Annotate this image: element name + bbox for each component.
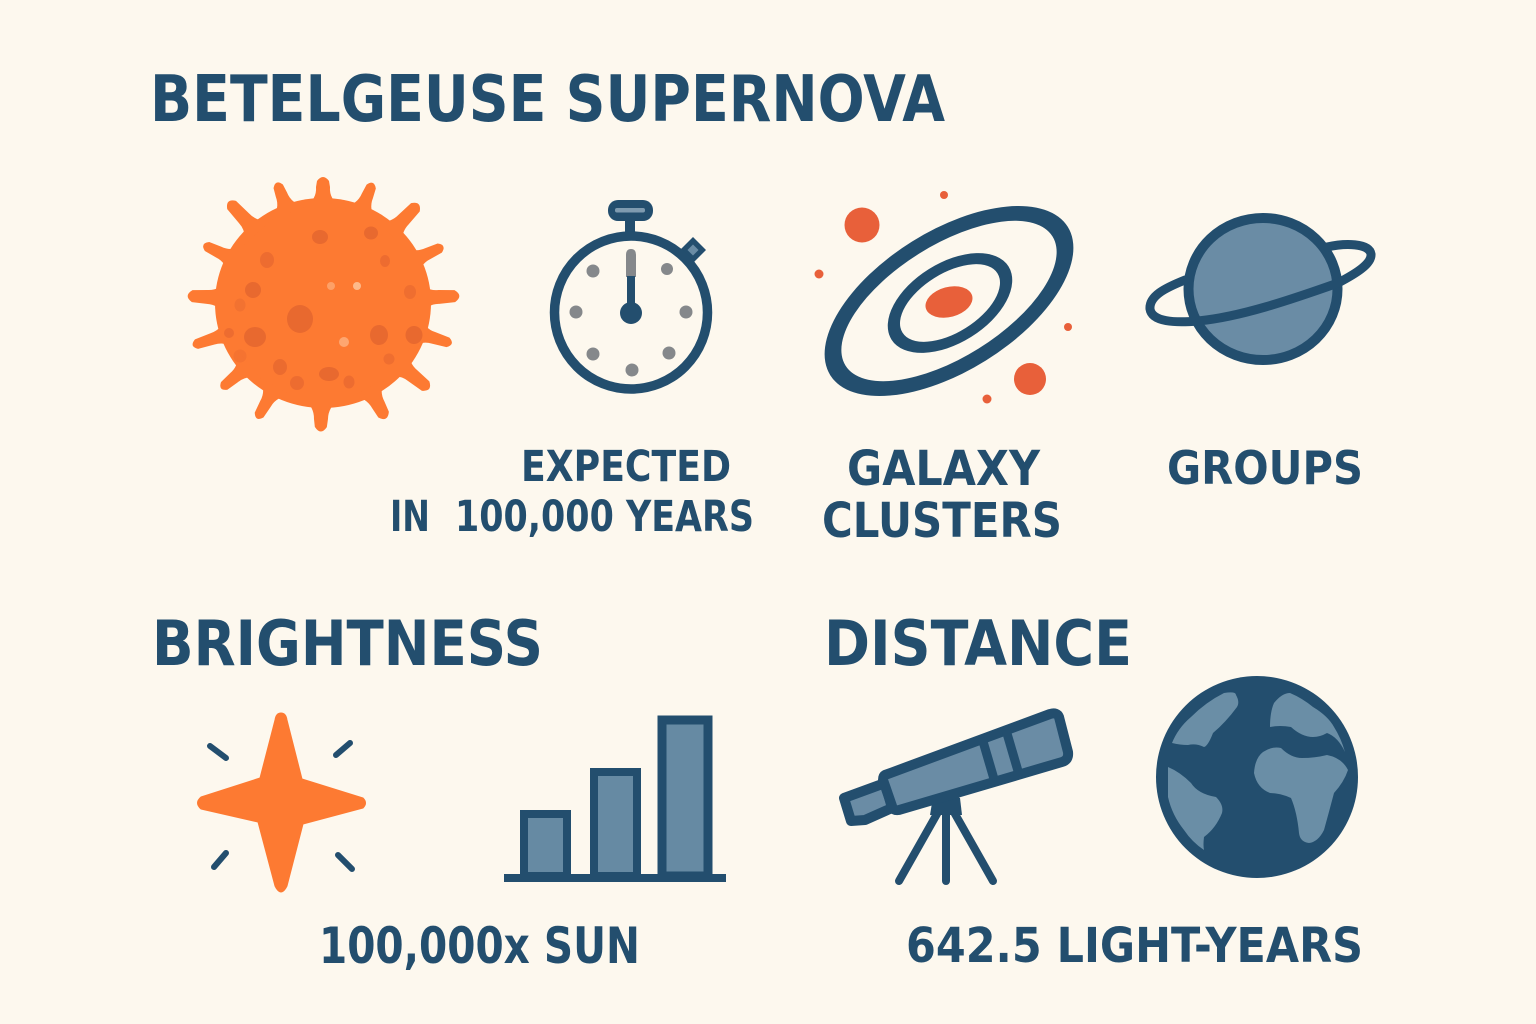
chart: rising bars: [504, 720, 726, 882]
label: expected in 100,000 years: EXPECTED: [521, 442, 731, 492]
label: galaxy clusters: GALAXY: [847, 441, 1041, 497]
label: galaxy clusters: CLUSTERS: [822, 493, 1062, 549]
label: expected in 100,000 years: 100,000 YEARS: [455, 492, 754, 542]
label: expected in 100,000 years: [390, 442, 754, 542]
icon: globe: [1156, 676, 1358, 878]
heading: distance: DISTANCE: [824, 607, 1132, 680]
label: 100,000x sun: 100,000x SUN: [319, 917, 640, 975]
label: 642.5 light-years: 642.5 LIGHT-YEARS: [906, 918, 1363, 974]
label: expected in 100,000 years: IN: [390, 492, 430, 542]
label: galaxy clusters: [822, 441, 1062, 549]
label: groups: GROUPS: [1167, 441, 1363, 495]
icon: stopwatch: [554, 200, 708, 389]
heading: brightness: BRIGHTNESS: [152, 607, 543, 680]
title: BETELGEUSE SUPERNOVA: [150, 63, 945, 137]
icon: ringed planet: [1150, 218, 1371, 360]
icon: sun / Betelgeuse: [187, 176, 460, 432]
icon: telescope on tripod: [844, 713, 1068, 881]
icon: four-point star with sparks: [198, 713, 366, 892]
icon: galaxy: [793, 167, 1105, 435]
